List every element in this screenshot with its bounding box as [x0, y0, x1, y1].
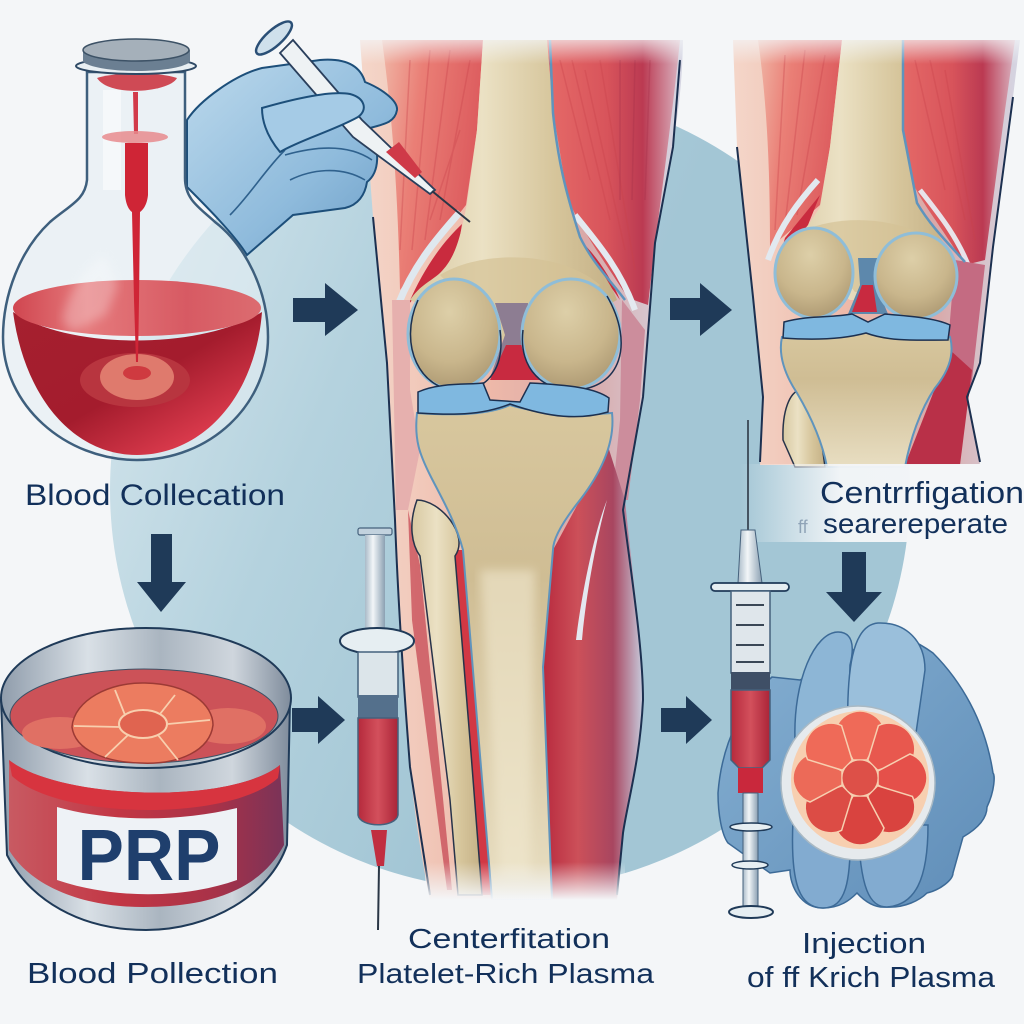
container body — [1, 700, 290, 930]
left condyle — [408, 279, 500, 389]
barrel — [280, 40, 435, 194]
tibia — [416, 405, 612, 900]
needle — [432, 191, 470, 222]
panel: central knee anatomy — [360, 40, 683, 906]
contents — [10, 669, 278, 763]
flange — [340, 628, 414, 654]
cap — [358, 528, 392, 535]
right condyle — [875, 233, 957, 319]
plasma — [358, 718, 398, 825]
arrow: PRP to syringe — [292, 696, 345, 744]
plasma — [731, 690, 770, 768]
meniscus — [783, 314, 950, 340]
right condyle — [522, 279, 620, 389]
side strips by the knee — [392, 300, 420, 510]
scale marks — [736, 605, 764, 662]
flange lower 2 — [732, 861, 768, 869]
lower right muscle — [543, 440, 643, 900]
muscle fibres — [400, 50, 650, 270]
panel: knee detail top right — [733, 40, 1020, 467]
arrow: knee to detail — [670, 283, 732, 336]
finger lower — [792, 820, 850, 908]
barrel clear — [358, 652, 398, 697]
meniscus — [418, 383, 609, 417]
icon: long syringe — [711, 420, 789, 918]
tissue cross-section — [781, 706, 935, 860]
fade at top of knee panels — [350, 30, 1024, 64]
background blue circle — [110, 90, 910, 890]
label: centrifugation top right: Centrrfigation — [820, 475, 1024, 510]
femur — [780, 40, 950, 300]
finger creases — [230, 148, 372, 215]
tibia highlight — [480, 570, 535, 880]
tendon bands — [768, 180, 818, 260]
arrow: flask to knee — [293, 283, 358, 336]
rod — [365, 535, 385, 635]
tissue — [22, 683, 266, 763]
label: centrifugation top right: searereperate — [823, 508, 1008, 539]
upper right muscle — [900, 40, 1015, 265]
red stripe beside fibula — [817, 425, 835, 467]
fibres — [775, 50, 975, 240]
label: injection of krich plasma: of ff Krich Plasma — [747, 962, 996, 994]
blood stream — [97, 74, 177, 362]
nub — [371, 830, 387, 866]
bright red stripe — [9, 760, 280, 810]
nub — [738, 768, 763, 793]
label backing top right — [740, 464, 1024, 542]
PRP label: PRP — [78, 816, 220, 896]
bottom fade of leg — [425, 862, 625, 900]
icon: syringe with plasma — [340, 528, 414, 930]
panel: blood collection flask — [3, 39, 268, 460]
femur lower shading — [805, 220, 940, 292]
plunger rod — [743, 793, 758, 908]
finger 2 — [848, 623, 925, 740]
flask lid — [76, 39, 196, 74]
neck highlight — [103, 90, 121, 190]
liquid surface — [13, 280, 261, 336]
upper left muscle — [382, 40, 483, 290]
syringe flange — [252, 17, 296, 59]
needle — [378, 866, 379, 930]
flask body — [3, 72, 268, 460]
finger 1 — [795, 632, 852, 740]
flask liquid — [13, 312, 262, 455]
plasma — [386, 142, 422, 178]
label: centerfitation platelet-rich plasma: Platelet-Rich Plasma — [357, 958, 654, 989]
notch red — [852, 285, 877, 312]
icon: gloved hand with syringe — [187, 17, 470, 255]
white tendon bands and red wedges — [398, 212, 460, 305]
leg skin silhouette — [360, 40, 683, 900]
finger lower 2 — [858, 825, 928, 907]
red stripe between bones — [450, 550, 494, 895]
clot — [80, 353, 190, 407]
notch — [490, 303, 538, 378]
femur lower shading — [440, 257, 600, 340]
flange — [711, 583, 789, 591]
label: centrifugation top right: ff — [798, 517, 809, 537]
needle — [747, 420, 749, 533]
label: injection of krich plasma — [747, 928, 996, 994]
dark band — [731, 672, 770, 690]
flask highlight — [62, 255, 118, 332]
upper right muscle — [547, 40, 680, 305]
dark band — [358, 695, 398, 720]
fibula — [783, 390, 825, 467]
icon: gloved hands holding tissue — [718, 623, 994, 908]
side strip right — [925, 260, 985, 465]
leg skin — [733, 40, 1020, 465]
femur — [410, 40, 617, 340]
condyle outlines — [410, 296, 621, 390]
label: centerfitation platelet-rich plasma — [357, 923, 654, 989]
hand base — [187, 60, 397, 255]
barrel clear — [731, 591, 770, 673]
arrow: down right — [826, 552, 882, 622]
label: injection of krich plasma: Injection — [802, 928, 926, 960]
tibia — [781, 332, 952, 467]
label: centrifugation top right — [798, 475, 1024, 539]
red band — [9, 760, 284, 907]
left condyle — [775, 228, 853, 318]
outlines — [737, 40, 1013, 462]
thumb — [262, 93, 364, 152]
fibula — [412, 500, 482, 895]
notch — [848, 258, 888, 314]
outline strokes of leg — [373, 40, 680, 895]
label: centerfitation platelet-rich plasma: Centerfitation — [408, 923, 610, 954]
arrow: center to syringe — [661, 696, 712, 744]
palm — [718, 632, 994, 908]
flange lower 1 — [730, 823, 772, 831]
lower left red strip — [408, 510, 452, 890]
arrow: down left — [137, 534, 186, 612]
label: blood pollection bottom: Blood Pollection — [27, 958, 278, 990]
lower right muscle — [905, 350, 972, 465]
neck — [738, 530, 762, 583]
rim — [1, 628, 291, 768]
label: blood collection top: Blood Collecation — [25, 479, 285, 512]
white streak in lower muscle — [576, 500, 607, 640]
bottom clean edge — [425, 900, 625, 906]
notch red — [490, 345, 540, 380]
panel: PRP container — [1, 628, 291, 930]
syringe — [252, 17, 470, 222]
upper left muscle — [758, 40, 842, 248]
base — [729, 906, 773, 918]
